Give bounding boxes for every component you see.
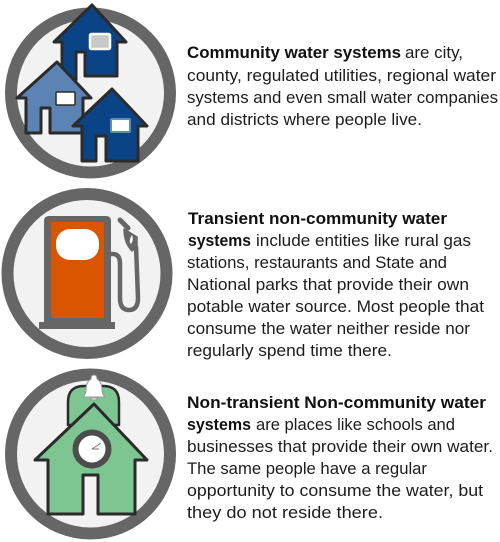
text: transient non-community water systems: systems — [188, 232, 251, 250]
text: community water systems: county, regulated utilities, regional water — [187, 67, 497, 85]
icon: gas pump — [8, 194, 166, 353]
text: non-transient non-community water systems — [187, 394, 493, 522]
icon: clock — [76, 432, 108, 466]
icon: front house — [73, 89, 147, 161]
icon: school — [11, 374, 170, 534]
text: transient non-community water systems: stations, restaurants and State and — [187, 254, 447, 272]
text: non-transient non-community water systems: businesses that provide their own water. — [187, 438, 493, 456]
text: transient non-community water systems — [187, 210, 484, 360]
icon: community houses — [11, 5, 170, 172]
text: non-transient non-community water systems: systems — [187, 416, 251, 434]
icon: top house — [54, 5, 126, 80]
icon: pump base — [39, 216, 115, 329]
icon: school tower — [68, 386, 119, 425]
icon: hose and nozzle — [111, 220, 138, 310]
text: non-transient non-community water systems: opportunity to consume the water, but — [187, 482, 483, 500]
text: transient non-community water systems: include entities like rural gas — [256, 232, 471, 250]
text: community water systems: and districts where people live. — [187, 111, 422, 129]
text: non-transient non-community water systems: are places like schools and — [256, 416, 455, 434]
icon: light house — [17, 62, 91, 133]
text: transient non-community water systems: Transient non-community water — [188, 210, 448, 228]
icon: pump window — [56, 229, 99, 260]
text: non-transient non-community water systems: The same people have a regular — [187, 460, 427, 478]
text: non-transient non-community water systems: they do not reside there. — [187, 504, 383, 522]
text: transient non-community water systems: consume the water neither reside nor — [187, 320, 471, 338]
text: transient non-community water systems: potable water source. Most people that — [187, 298, 484, 316]
text: community water systems: Community water systems — [187, 44, 401, 62]
icon: bell — [83, 375, 105, 400]
icon: school building — [35, 404, 147, 514]
text: transient non-community water systems: National parks that provide their own — [187, 276, 469, 294]
text: community water systems: systems and even small water companies — [187, 89, 498, 107]
text: non-transient non-community water systems: Non-transient Non-community water — [187, 394, 487, 412]
text: community water systems: are city, — [405, 44, 463, 62]
text: transient non-community water systems: regularly spend time there. — [187, 342, 392, 360]
text: community water systems — [187, 44, 498, 129]
icon: pump body — [51, 222, 104, 318]
